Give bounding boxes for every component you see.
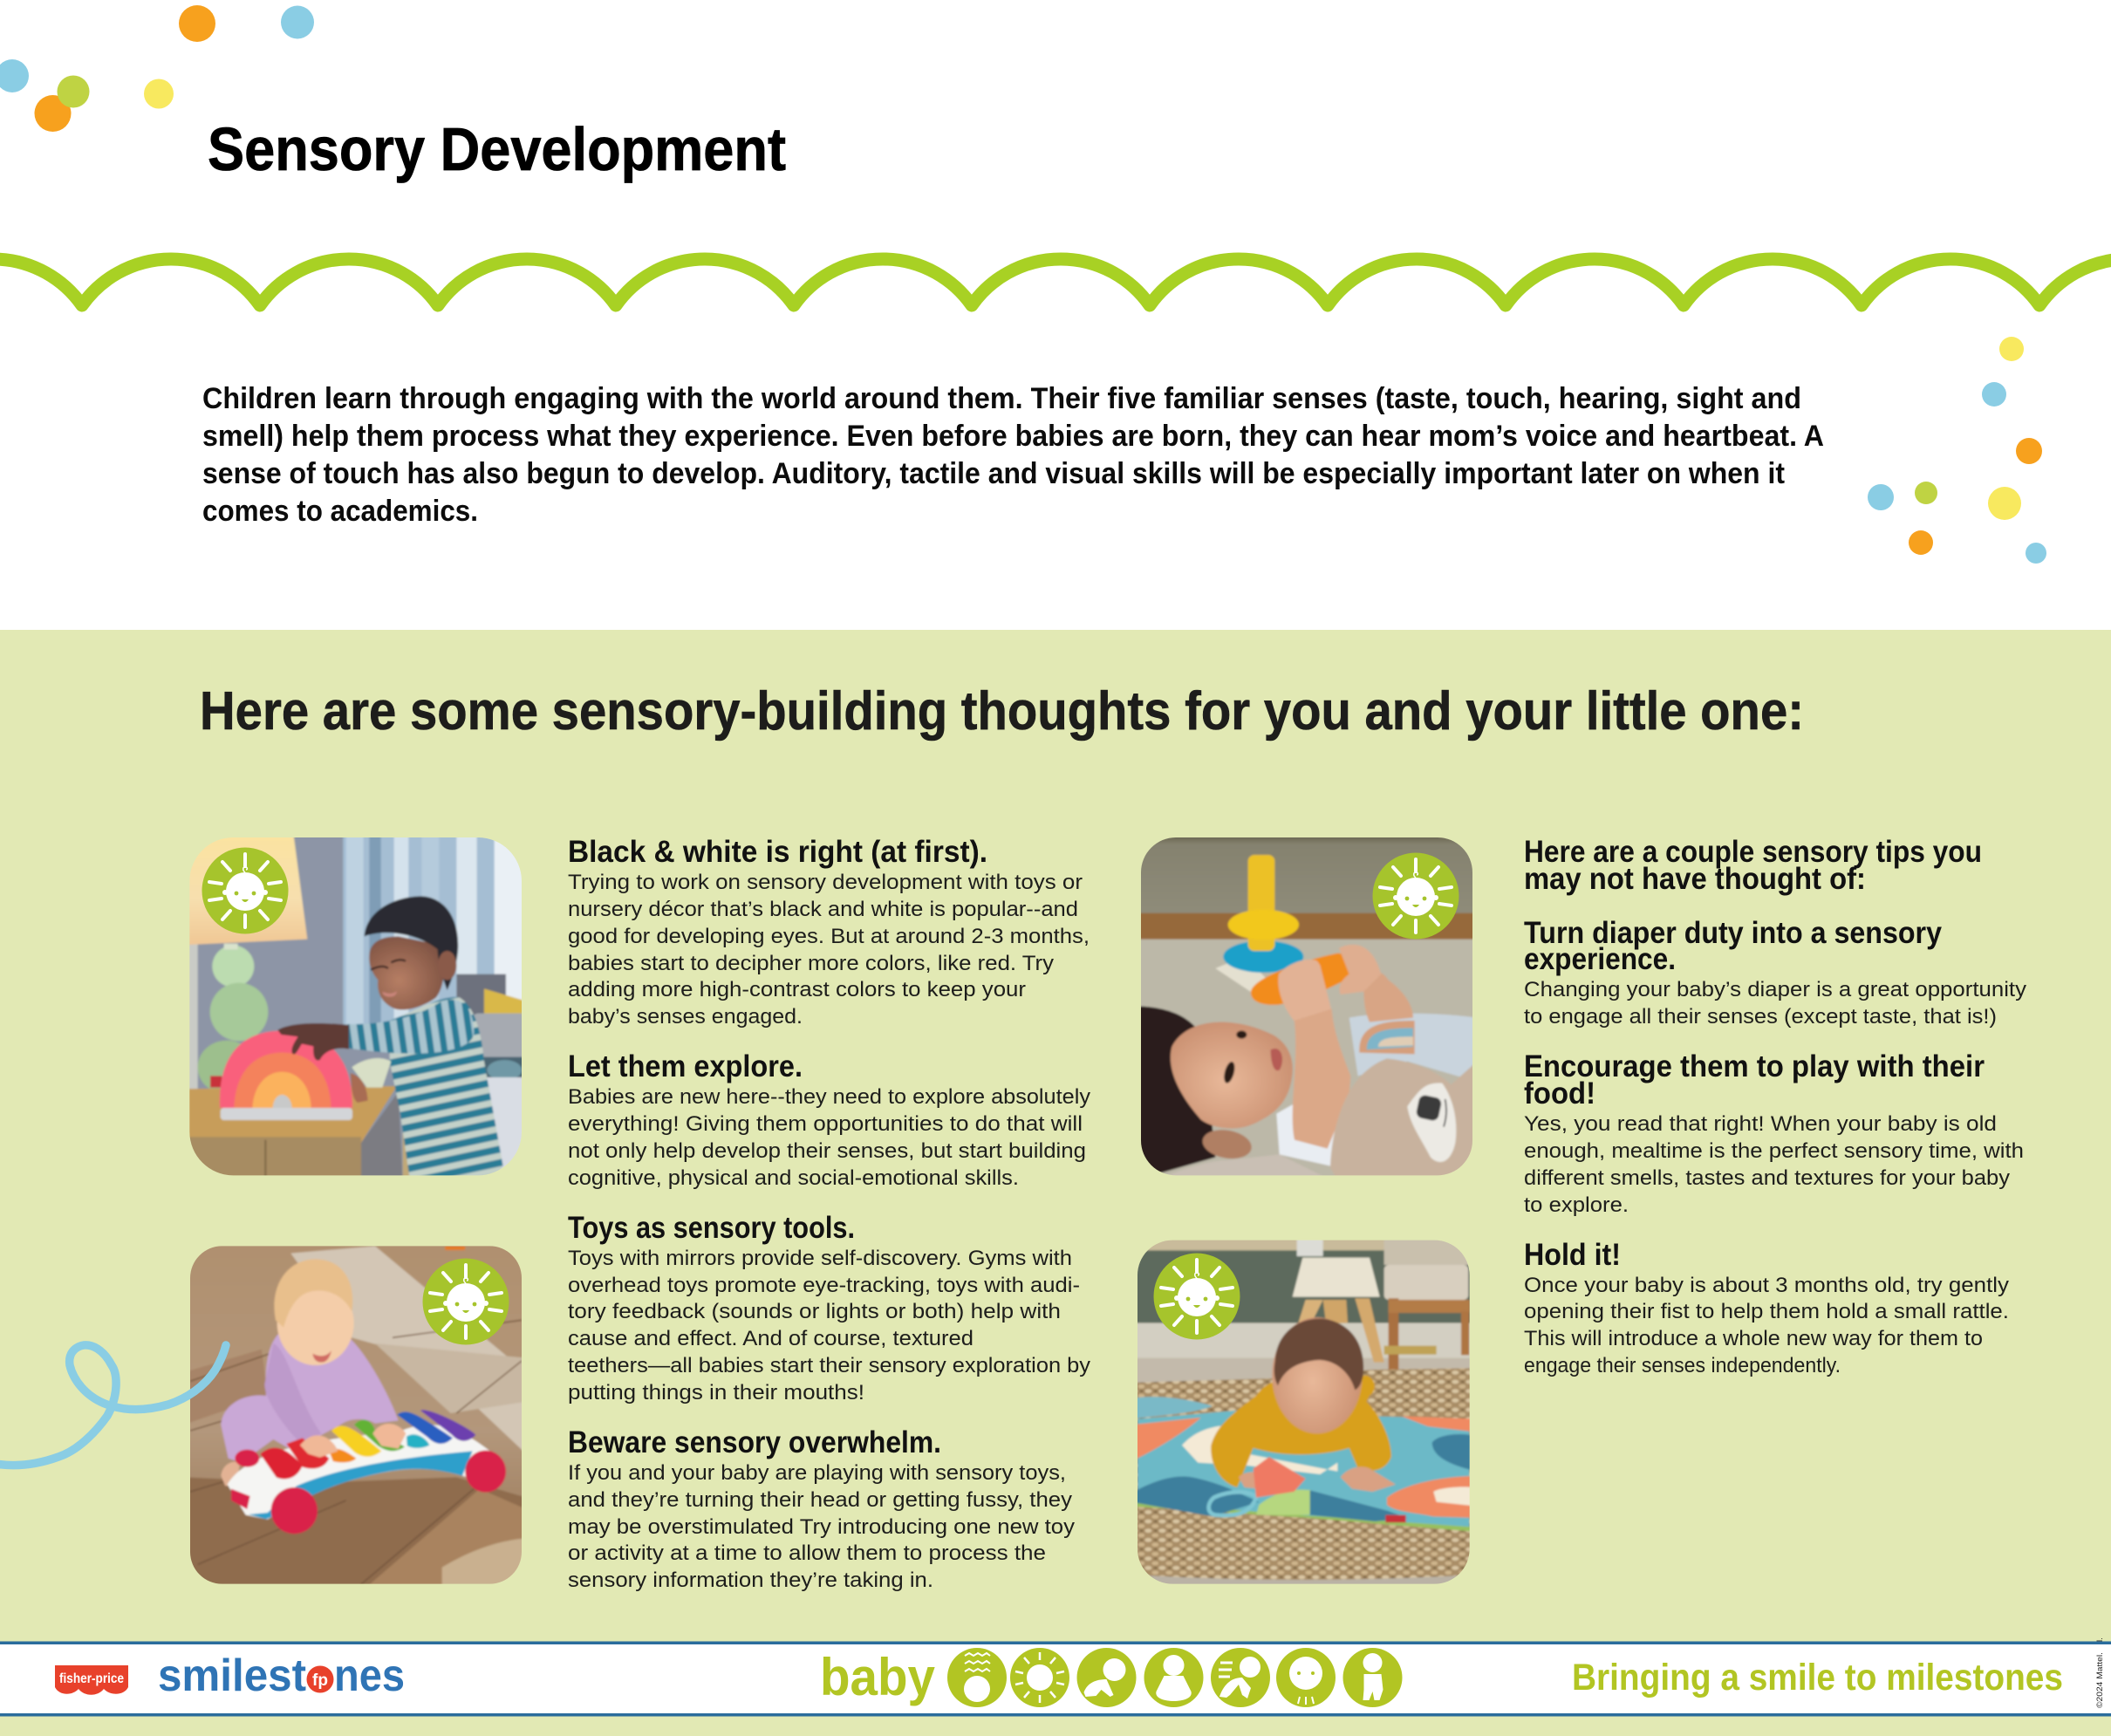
copyright: l. (2095, 1637, 2105, 1642)
text block: Beware sensory overwhelm: sensory information they’re taking in. (568, 1569, 933, 1592)
text block: Turn diaper duty (1524, 916, 2027, 1029)
text block: Beware sensory overwhelm: Beware sensory overwhelm. (568, 1425, 941, 1459)
text block: Toys as sensory tools: tory feedback (sounds or lights or both) help with (568, 1300, 1061, 1323)
text block: Black and white: babies start to decipher more colors, like red. Try (568, 952, 1055, 975)
text block: Let them explore: cognitive, physical and social-emotional skills. (568, 1166, 1019, 1190)
logo: smilestones: smilest (158, 1651, 306, 1701)
tagline: Bringing a smile to milestones (1572, 1657, 2063, 1698)
text block: Let them explore: Babies are new here--they need to explore absolutely (568, 1085, 1091, 1109)
text block: Encourage them to play with food: to explore. (1524, 1193, 1629, 1217)
photo: baby lying with rattle and plush otter (1134, 831, 1480, 1180)
logo: smilestones: fp (312, 1671, 328, 1690)
text block: Toys as sensory tools: Toys with mirrors provide self-discovery. Gyms with (568, 1247, 1072, 1270)
decorative dots: top left (0, 5, 314, 132)
text block: Hold it (1524, 1238, 2010, 1377)
logo: Fisher-Price: fisher-price (59, 1671, 124, 1686)
text block: Black and white: nursery décor that’s black and white is popular--and (568, 898, 1078, 921)
text block: Black and white: Black & white is right (at first). (568, 835, 987, 869)
icon: smiling baby sun badge (422, 1258, 509, 1345)
text block: Encourage them to play with food (1524, 1049, 2024, 1217)
text block: Encourage them to play with food: different smells, tastes and textures for your baby (1524, 1166, 2011, 1190)
text block: Turn diaper duty: to engage all their senses (except taste, that is!) (1524, 1005, 1997, 1029)
text block: Toys as sensory tools: overhead toys promote eye-tracking, toys with audi- (568, 1274, 1080, 1297)
text block: Encourage them to play with food: food! (1524, 1076, 1595, 1111)
text block: couple sensory tips heading: may not have thought of: (1524, 862, 1866, 896)
text block: Encourage them to play with food: Encourage them to play with their (1524, 1049, 1985, 1083)
panel: green tips background (0, 630, 2111, 1736)
text block: Beware sensory overwhelm: If you and your baby are playing with sensory toys, (568, 1461, 1066, 1485)
decorative dots: right (1868, 337, 2046, 564)
decorative blue swirl (0, 1345, 226, 1466)
text block: Toys as sensory tools: cause and effect. And of course, textured (568, 1327, 974, 1350)
text block: Toys as sensory tools: teethers—all babies start their sensory exploration by (568, 1354, 1091, 1377)
text block: Hold it: opening their fist to help them hold a small rattle. (1524, 1300, 2009, 1323)
text block: Beware sensory overwhelm: may be overstimulated Try introducing one new toy (568, 1515, 1076, 1539)
text block: Beware sensory overwhelm: and they’re turning their head or getting fussy, they (568, 1488, 1073, 1512)
text block: Turn diaper duty: experience. (1524, 942, 1676, 976)
photo: toddler touching rainbow night light (181, 829, 530, 1184)
intro paragraph: smell) help them process what they experience. Even before babies are born, they can hear mom’s voice and heartbeat. A (202, 420, 1824, 453)
text block: Black and white: adding more high-contrast colors to keep your (568, 978, 1026, 1001)
text block: Let them explore: everything! Giving them opportunities to do that will (568, 1112, 1083, 1136)
text block: Let them explore: not only help develop their senses, but start building (568, 1139, 1086, 1163)
text block: couple sensory tips heading (1524, 835, 1982, 896)
icon: sun badge on third photo (1373, 853, 1459, 939)
text block: Beware sensory overwhelm (568, 1425, 1076, 1592)
footer band (0, 1642, 2111, 1717)
icon: sun badge on fourth photo (1153, 1253, 1240, 1340)
logo: smilestones (158, 1651, 405, 1701)
photo: baby playing toy xylophone (183, 1239, 529, 1590)
icon row: baby milestones (947, 1648, 1403, 1707)
text block: Let them explore: Let them explore. (568, 1049, 803, 1083)
photo badge: first photo sun (202, 848, 288, 933)
text block: Encourage them to play with food: enough, mealtime is the perfect sensory time, with (1524, 1139, 2024, 1163)
text block: Black and white: baby’s senses engaged. (568, 1005, 803, 1029)
label: baby: baby (820, 1648, 936, 1706)
text block: Black and white: Trying to work on sensory development with toys or (568, 871, 1083, 894)
intro paragraph (202, 382, 1824, 528)
logo: smilestones: nes (334, 1651, 405, 1701)
text block: Turn diaper duty: Changing your baby’s diaper is a great opportunity (1524, 978, 2027, 1001)
logo: Fisher-Price (55, 1665, 128, 1695)
text block: Toys as sensory tools (568, 1211, 1091, 1405)
text block: Encourage them to play with food: Yes, you read that right! When your baby is old (1524, 1112, 1997, 1136)
text block: Turn diaper duty: Turn diaper duty into a sensory (1524, 916, 1942, 950)
section heading: Here are some sensory-building thoughts for you and your little one: (200, 681, 1804, 742)
text block: Hold it: Hold it! (1524, 1238, 1621, 1272)
text block: Beware sensory overwhelm: or activity at a time to allow them to process the (568, 1541, 1046, 1565)
text block: Black and white: good for developing eyes. But at around 2-3 months, (568, 925, 1090, 948)
intro paragraph: Children learn through engaging with the world around them. Their five familiar senses (taste, touch, hearing, sight and (202, 382, 1801, 415)
intro paragraph: sense of touch has also begun to develop. Auditory, tactile and visual skills will be especially important later on when it (202, 457, 1785, 490)
title: Sensory Development (208, 115, 786, 183)
scalloped green divider (0, 259, 2111, 305)
copyright: ©2024 Mattel. (2095, 1652, 2105, 1708)
intro paragraph: comes to academics. (202, 495, 478, 528)
text block: Let them explore (568, 1049, 1091, 1190)
text block: Toys as sensory tools: putting things in their mouths! (568, 1381, 864, 1405)
text block: Hold it: This will introduce a whole new way for them to (1524, 1327, 1983, 1350)
photo: baby doing tummy time on play mat (1131, 1233, 1477, 1590)
text block: Hold it: engage their senses independently. (1524, 1354, 1841, 1377)
text block: Black and white (568, 835, 1090, 1029)
text block: Toys as sensory tools: Toys as sensory tools. (568, 1211, 855, 1245)
text block: couple sensory tips heading: Here are a couple sensory tips you (1524, 835, 1982, 869)
text block: Hold it: Once your baby is about 3 months old, try gently (1524, 1274, 2010, 1297)
